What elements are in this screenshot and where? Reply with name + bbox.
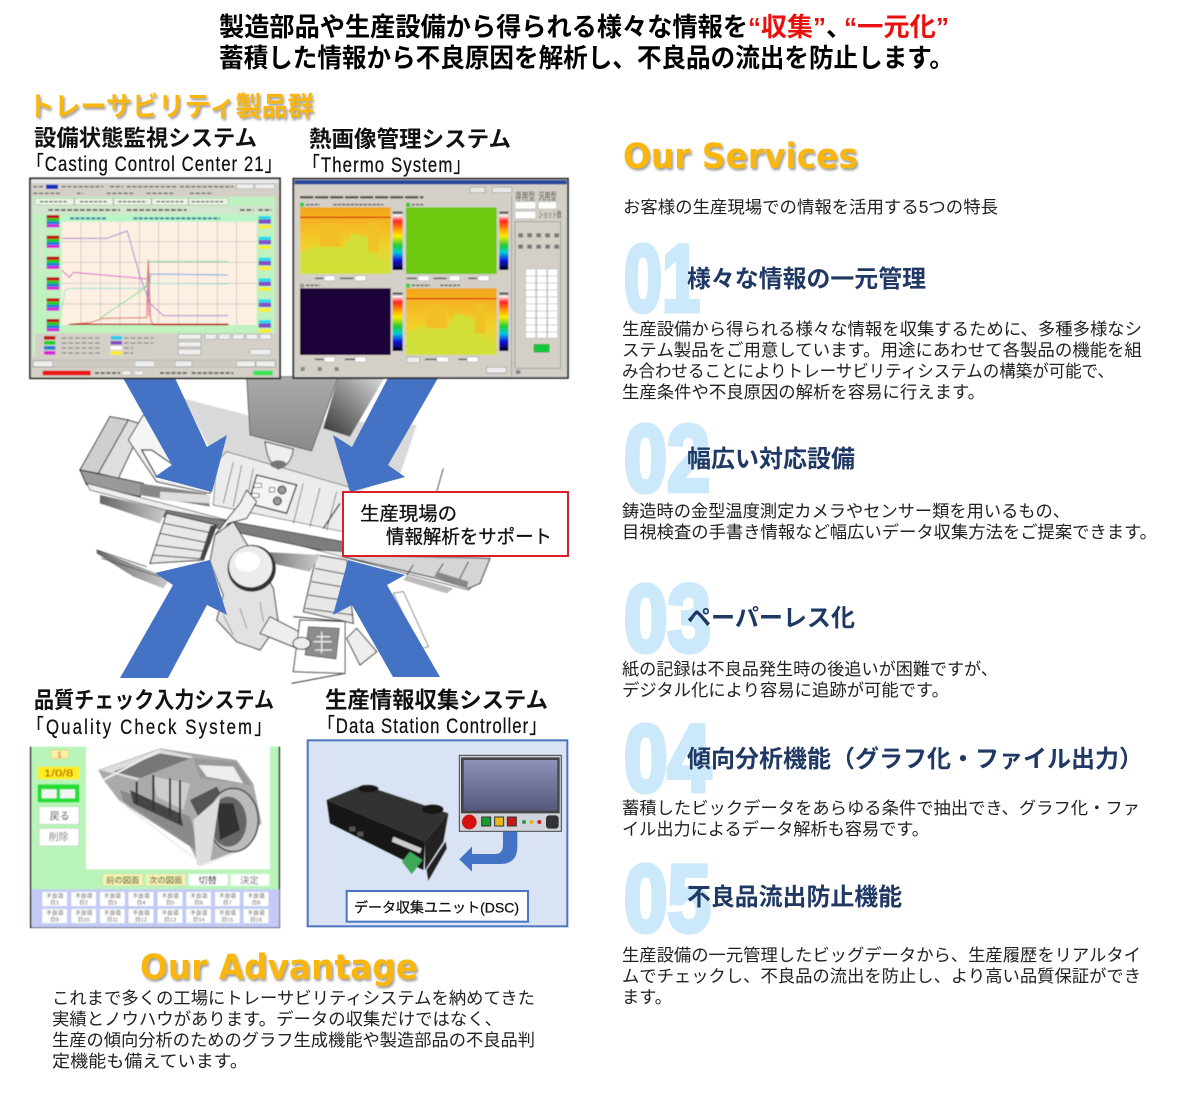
screen: quality check system: 目9 — [50, 917, 59, 924]
label: data station controller: 「Data Station Controller」 — [318, 714, 546, 739]
arrow: panel to hardware — [459, 832, 517, 872]
heading: traceability products: トレーサビリティ製品群 — [28, 92, 314, 122]
feature 04: イル出力によるデータ解析も容易です。 — [622, 819, 929, 839]
title — [219, 12, 954, 73]
screen: quality check system: 目14 — [193, 917, 205, 924]
text: advantage description: 定機能も備えています。 — [52, 1051, 248, 1071]
title: 、 — [826, 12, 852, 42]
label: thermal image system: 「Thermo System」 — [303, 153, 470, 178]
screen: quality check system: 不良項 — [104, 892, 121, 900]
screen: quality check system: 不良項 — [219, 909, 236, 917]
feature 04: 04 — [624, 706, 711, 812]
feature 05: 05 — [624, 846, 711, 952]
text: advantage description — [52, 988, 535, 1071]
feature 03: 03 — [624, 566, 711, 672]
feature 01: み合わせることによりトレーサビリティシステムの構築が可能で、 — [622, 361, 1114, 381]
screen: quality check system: 不良項 — [162, 892, 179, 900]
screen: quality check system: 切替 — [198, 874, 217, 885]
panel: data collection unit — [308, 740, 567, 926]
arrow: bottom right — [333, 560, 440, 677]
screen: quality check system: 不良項 — [75, 892, 92, 900]
screen: quality check system: 目3 — [108, 900, 117, 907]
screen: quality check system: 不良項 — [219, 892, 236, 900]
screen: quality check system: 不良項 — [248, 909, 265, 917]
feature 01: 生産設備から得られる様々な情報を収集するために、多種多様なシ — [622, 319, 1142, 339]
feature 05: ムでチェックし、不良品の流出を防止し、より高い品質保証ができ — [622, 966, 1141, 986]
feature 03: デジタル化により容易に追跡が可能です。 — [622, 680, 949, 700]
screen: quality check system: 不良項 — [46, 909, 63, 917]
screen: thermo system: ショット数 — [538, 208, 562, 219]
screen: quality check system: 不良項 — [133, 892, 150, 900]
feature 01: 様々な情報の一元管理 — [687, 266, 926, 293]
text: advantage description: これまで多くの工場にトレーサビリティシステムを納めてきた — [52, 988, 535, 1008]
screen: quality check system: 目12 — [135, 917, 147, 924]
screen: quality check system: 目13 — [164, 917, 176, 924]
screen: quality check system: 前の図面 — [106, 875, 139, 885]
screen: quality check system: 目6 — [194, 900, 203, 907]
screen: quality check system: 目11 — [107, 917, 118, 924]
screen: quality check system: 目15 — [221, 917, 233, 924]
label: data station controller: 生産情報収集システム — [325, 688, 548, 713]
screen: quality check system: 1/0/8 — [44, 769, 74, 780]
screen: quality check system: 決定 — [240, 874, 259, 885]
label: thermal image system: 熱画像管理システム — [309, 127, 511, 152]
screen: quality check system: 不良項 — [46, 892, 63, 900]
screen: quality check system: 目8 — [252, 900, 260, 907]
feature 01: 01 — [624, 226, 700, 332]
title: “一元化” — [844, 12, 949, 42]
feature 01 — [622, 226, 1142, 402]
title: 製造部品や生産設備から得られる様々な情報を — [219, 12, 748, 42]
screen: quality check system — [31, 747, 279, 927]
feature 02: 幅広い対応設備 — [687, 446, 855, 473]
screen: thermo system — [293, 179, 568, 378]
screen: quality check system: 不良項 — [162, 909, 179, 917]
label: DSC unit: データ収集ユニット(DSC) — [354, 900, 519, 916]
label: quality check system — [27, 688, 274, 740]
label: DSC unit — [347, 891, 528, 922]
text: advantage description: 生産の傾向分析のためのグラフ生成機能や製造部品の不良品判 — [52, 1030, 535, 1050]
arrow: top left — [123, 378, 227, 492]
arrow: top right — [333, 378, 438, 492]
screen: quality check system: 目5 — [166, 900, 174, 907]
feature 03: ペーパーレス化 — [687, 605, 855, 632]
label: quality check system: 品質チェック入力システム — [34, 688, 274, 713]
screen: quality check system: 目16 — [250, 917, 262, 924]
title: “収集” — [748, 12, 826, 42]
screen: quality check system: 不良項 — [190, 909, 207, 917]
screen: quality check system: 不良項 — [190, 892, 207, 900]
icon: DSC hardware — [327, 785, 448, 881]
screen: quality check system: 目1 — [50, 900, 59, 907]
feature 04: 傾向分析機能（グラフ化・ファイル出力） — [687, 745, 1143, 773]
text: services intro: お客様の生産現場での情報を活用する5つの特長 — [623, 197, 998, 217]
callout: site analysis support: 生産現場の — [360, 503, 457, 525]
feature 05: ます。 — [622, 987, 672, 1007]
feature 04 — [622, 706, 1143, 839]
label: equipment monitoring system: 「Casting Control Center 21」 — [27, 152, 281, 177]
screen: quality check system: 不良項 — [248, 892, 265, 900]
feature 05: 不良品流出防止機能 — [687, 884, 902, 911]
label: thermal image system — [303, 127, 511, 178]
callout: site analysis support: 情報解析をサポート — [386, 526, 552, 548]
screen: thermo system: 専用型 — [515, 190, 535, 203]
screen: quality check system: 目7 — [223, 900, 232, 907]
screen: quality check system: 目10 — [78, 917, 90, 924]
label: equipment monitoring system: 設備状態監視システム — [34, 126, 257, 151]
icon: operator panel — [459, 755, 561, 831]
screen: quality check system: 1 — [57, 751, 62, 760]
feature 02: 目視検査の手書き情報など幅広いデータ収集方法をご提案できます。 — [622, 522, 1157, 542]
screen: quality check system: 次の図面 — [149, 875, 182, 885]
arrow: bottom left — [120, 560, 227, 678]
title: 蓄積した情報から不良原因を解析し、不良品の流出を防止します。 — [219, 43, 954, 73]
feature 05 — [622, 846, 1141, 1007]
callout: site analysis support — [343, 492, 568, 556]
text: advantage description: 実績とノウハウがあります。データの収集だけではなく、 — [52, 1009, 502, 1029]
feature 04: 蓄積したビックデータをあらゆる条件で抽出でき、グラフ化・ファ — [622, 798, 1140, 818]
feature 05: 生産設備の一元管理したビッグデータから、生産履歴をリアルタイ — [622, 945, 1141, 965]
feature 02: 鋳造時の金型温度測定カメラやセンサー類を用いるもの、 — [622, 501, 1070, 521]
factory illustration — [80, 377, 490, 683]
heading: our advantage: Our Advantage — [140, 948, 418, 988]
screen: quality check system: 目4 — [137, 900, 145, 907]
feature 02: 02 — [624, 406, 710, 512]
label: quality check system: 「Quality Check System」 — [27, 715, 271, 740]
screen: quality check system: 削除 — [49, 831, 69, 844]
screen: quality check system: 不良項 — [133, 909, 150, 917]
screen: thermo system: 汎用型 — [538, 190, 557, 203]
feature 01: 生産条件や不良原因の解析を容易に行えます。 — [622, 382, 985, 402]
label: data station controller — [318, 688, 548, 739]
feature 02 — [622, 406, 1157, 542]
screen: casting control center — [30, 178, 280, 378]
feature 03: 紙の記録は不良品発生時の後追いが困難ですが、 — [622, 659, 998, 679]
screen: quality check system: 不良項 — [75, 909, 92, 917]
label: equipment monitoring system — [27, 126, 281, 177]
heading: our services: Our Services — [623, 137, 858, 177]
screen: quality check system: 戻る — [50, 810, 70, 822]
screen: quality check system: 目2 — [79, 900, 88, 907]
feature 01: ステム製品をご用意しています。用途にあわせて各製品の機能を組 — [622, 340, 1142, 360]
screen: quality check system: 不良項 — [104, 909, 121, 917]
feature 03 — [622, 566, 998, 700]
